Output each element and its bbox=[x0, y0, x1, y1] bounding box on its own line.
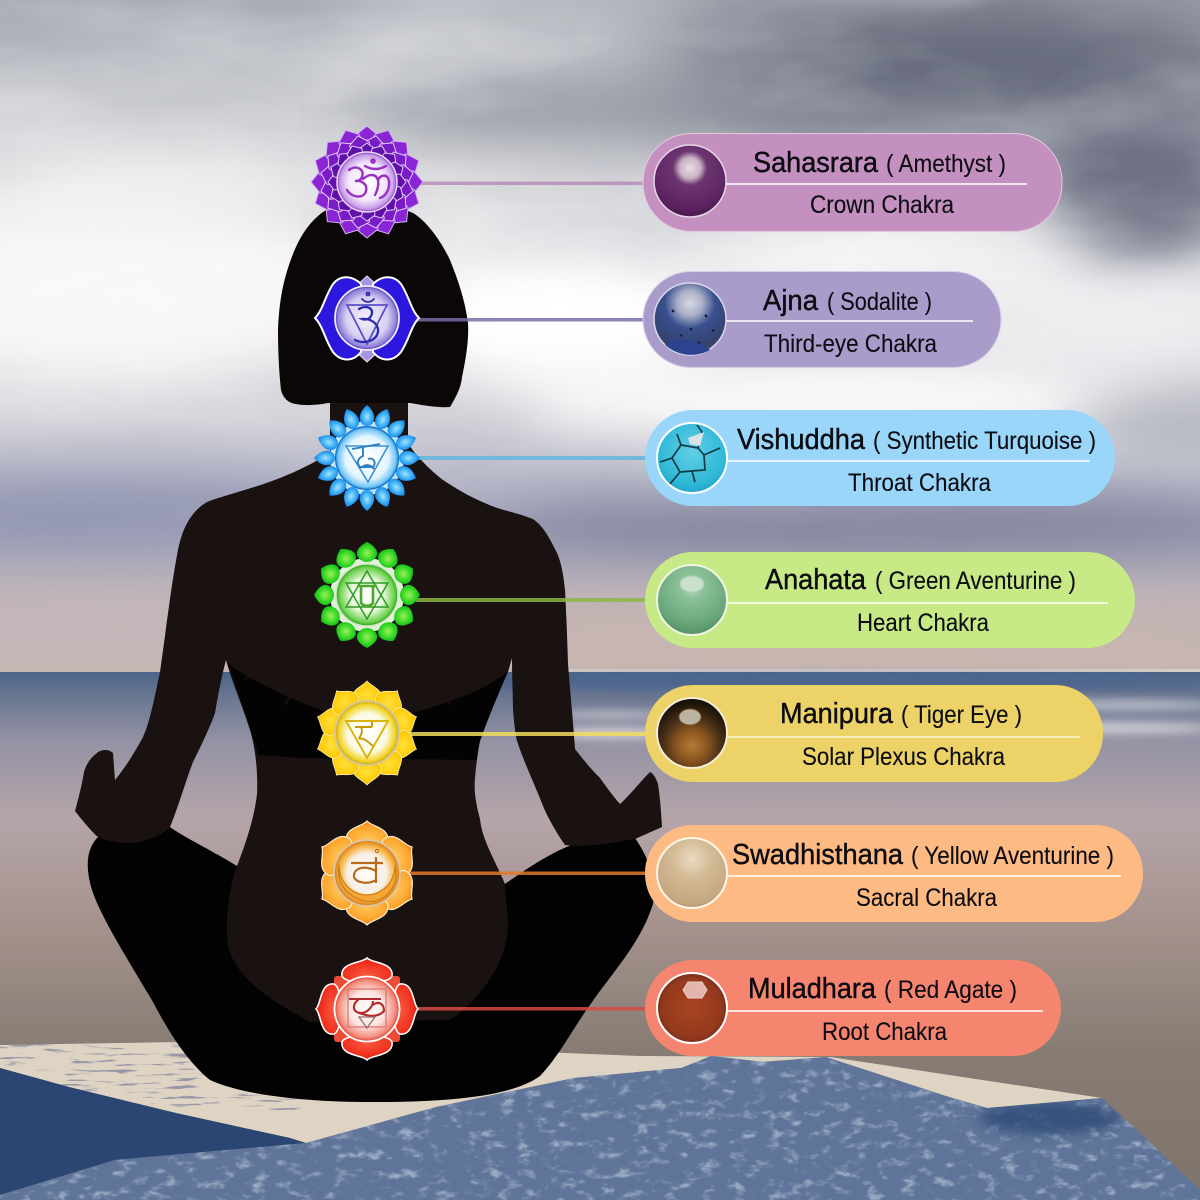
label: Tiger Eye: ( Tiger Eye ) bbox=[901, 701, 1022, 729]
panel: Sahasrara bbox=[643, 134, 1062, 232]
label: Ajna name: Ajna bbox=[763, 285, 819, 317]
label: Manipura name: Manipura bbox=[780, 698, 894, 730]
top band bbox=[227, 662, 507, 760]
bead: yellow aventurine bbox=[657, 838, 727, 908]
label: Synthetic Turquoise: ( Synthetic Turquoise ) bbox=[873, 427, 1096, 455]
back shadow lines bbox=[245, 540, 490, 705]
label: Throat Chakra: Throat Chakra bbox=[848, 469, 991, 497]
triangle and glyph bbox=[346, 721, 388, 758]
label: Yellow Aventurine: ( Yellow Aventurine ) bbox=[911, 842, 1114, 870]
icon: Muladhara root chakra bbox=[316, 958, 418, 1060]
panel: Swadhisthana bbox=[645, 825, 1143, 922]
icon: Anahata heart chakra bbox=[314, 542, 420, 648]
bead: sodalite bbox=[654, 283, 726, 355]
star and glyph bbox=[346, 571, 388, 619]
background: sea and horizon bbox=[0, 669, 1200, 1200]
bead: amethyst bbox=[654, 145, 726, 217]
label: Crown Chakra: Crown Chakra bbox=[810, 191, 954, 219]
bead: green aventurine bbox=[657, 565, 727, 635]
icon: Sahasrara crown chakra bbox=[311, 126, 423, 238]
foreground: dark blue cliff bbox=[0, 1068, 306, 1195]
om symbol bbox=[347, 159, 389, 198]
panel: Vishuddha bbox=[645, 410, 1115, 506]
label: Anahata name: Anahata bbox=[765, 564, 867, 596]
bead: red agate bbox=[657, 973, 727, 1043]
label: Root Chakra: Root Chakra bbox=[822, 1018, 947, 1046]
torso and arms bbox=[75, 400, 662, 1022]
foreground: cream rock ledge bbox=[0, 1040, 1102, 1143]
icon: Swadhisthana sacral chakra bbox=[311, 821, 423, 925]
background: cloudy sky bbox=[0, 0, 1200, 675]
crescent and glyph bbox=[339, 849, 396, 901]
bead: synthetic turquoise bbox=[657, 423, 727, 493]
foreground: mottled blue rock bbox=[0, 1050, 1200, 1200]
connector lines bbox=[390, 182, 646, 1010]
legs bbox=[88, 827, 654, 1102]
label: Sacral Chakra: Sacral Chakra bbox=[856, 884, 997, 912]
label: Green Aventurine: ( Green Aventurine ) bbox=[875, 567, 1076, 595]
label: Sodalite: ( Sodalite ) bbox=[827, 288, 932, 316]
panel: Muladhara bbox=[645, 960, 1061, 1056]
label: Solar Plexus Chakra: Solar Plexus Chakra bbox=[802, 743, 1005, 771]
label: Vishuddha name: Vishuddha bbox=[737, 424, 866, 456]
label: Red Agate: ( Red Agate ) bbox=[884, 976, 1017, 1004]
label: Third-eye Chakra: Third-eye Chakra bbox=[764, 330, 937, 358]
triangle and glyph bbox=[347, 292, 387, 344]
meditating silhouette bbox=[75, 205, 662, 1102]
icon: Vishuddha throat chakra bbox=[314, 405, 420, 511]
icon: Manipura solar plexus chakra bbox=[313, 681, 421, 785]
hair bbox=[278, 205, 468, 407]
label: Swadhisthana name: Swadhisthana bbox=[732, 839, 904, 871]
panel: Anahata bbox=[645, 552, 1135, 648]
panel: Manipura bbox=[645, 685, 1103, 782]
panel: Ajna bbox=[643, 272, 1001, 368]
bead: tiger eye bbox=[657, 698, 727, 768]
label: Heart Chakra: Heart Chakra bbox=[857, 609, 989, 637]
triangle and glyph bbox=[346, 444, 388, 482]
label: Sahasrara name: Sahasrara bbox=[753, 147, 879, 179]
label: Amethyst: ( Amethyst ) bbox=[886, 150, 1006, 178]
icon: Ajna third-eye chakra bbox=[315, 276, 419, 362]
square and glyph bbox=[348, 989, 386, 1028]
label: Muladhara name: Muladhara bbox=[748, 973, 877, 1005]
